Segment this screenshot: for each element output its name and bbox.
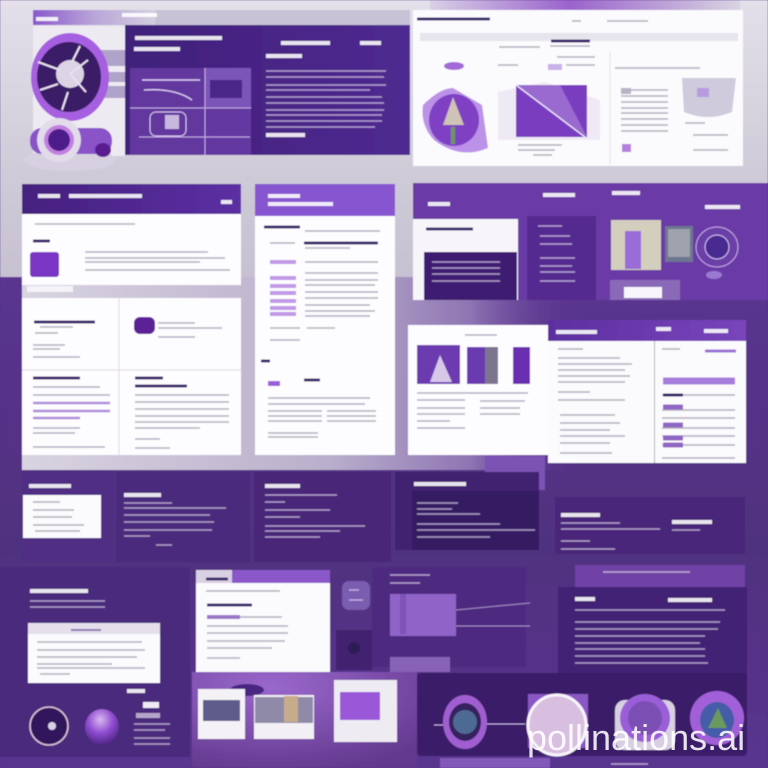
- text block: columns: [498, 41, 700, 165]
- panel: lavender gallery: [192, 672, 417, 768]
- band: bottom-right caption: [575, 565, 745, 590]
- small table graphic: [682, 78, 736, 150]
- bottom caption strips: [440, 758, 648, 768]
- dividers: [22, 298, 241, 455]
- heading: [575, 599, 712, 600]
- panel heading: [134, 38, 222, 49]
- panel: bottom-left dark: [0, 567, 190, 757]
- icon: ring: [696, 227, 738, 279]
- chart panel: [130, 68, 251, 155]
- text lines: [426, 193, 740, 281]
- header bar: [255, 184, 395, 216]
- panel: top-right white report: [413, 10, 743, 166]
- panel: white note with purple header: [196, 570, 330, 672]
- icon: dark badge: [134, 317, 155, 334]
- text block: [575, 610, 725, 663]
- card: dark right: [555, 497, 745, 554]
- image: white disc: [528, 694, 588, 755]
- card: text: [116, 472, 250, 562]
- white chip: [27, 286, 73, 292]
- panel: centre white report: [255, 184, 395, 455]
- watermark: pollinations.ai: [527, 717, 745, 758]
- dark report panel: [125, 25, 410, 155]
- text block: [558, 349, 735, 458]
- highlighted lines: [33, 378, 229, 448]
- white side area: [33, 26, 125, 156]
- image tiles: [417, 345, 530, 384]
- top gradient bar: [430, 0, 740, 10]
- lower white sub-panels: [22, 298, 241, 455]
- panel: top-left device and dark report: [24, 10, 410, 171]
- panel: left white report: [22, 184, 241, 455]
- panel: glassy folder: [372, 567, 530, 667]
- list items: [33, 322, 222, 357]
- row of dark panels: [22, 456, 745, 562]
- icon: purple folder: [30, 252, 59, 277]
- panel: lavender header report: [548, 320, 746, 463]
- icon: purple lens: [422, 88, 488, 152]
- image: colored blocks: [254, 695, 314, 739]
- icon: ring: [30, 707, 68, 745]
- labels: [127, 691, 170, 744]
- icon: green core lens: [690, 691, 744, 745]
- panel: dark text report: [558, 587, 747, 707]
- panel: white image report: [408, 325, 548, 455]
- text block: [35, 224, 230, 270]
- image: purple cube: [334, 680, 397, 742]
- strip: lavender: [390, 657, 450, 672]
- heading: [30, 591, 105, 607]
- purple thumbnail: [622, 144, 631, 152]
- image: boxes: [611, 220, 693, 270]
- text block: [268, 231, 380, 437]
- caption box: [610, 280, 680, 300]
- icon: purple device with flower: [31, 33, 125, 121]
- image: towers: [198, 689, 245, 739]
- highlighted list: [663, 378, 735, 384]
- text block: [266, 43, 386, 135]
- panel: right dark report: [413, 183, 768, 300]
- icon: purple badge: [444, 62, 464, 70]
- white note: [28, 623, 160, 683]
- card: text: [254, 472, 391, 562]
- panel heading: [417, 19, 648, 21]
- card: white note: [22, 470, 114, 562]
- icon: purple camera lens: [615, 694, 675, 750]
- text block: [417, 393, 528, 428]
- icon: purple orb: [85, 709, 119, 745]
- text block: [206, 591, 288, 658]
- header strip: [33, 10, 410, 25]
- highlighted stripes: [270, 262, 296, 314]
- header bar: [22, 184, 241, 214]
- icon: ring lens device: [24, 118, 116, 171]
- icon: dark cap: [230, 684, 264, 696]
- chart: diagonal purple box: [498, 82, 600, 155]
- heading: [465, 334, 497, 336]
- panel: rings row: [417, 673, 747, 768]
- purple accent: [264, 226, 300, 228]
- icon: dark dot: [336, 630, 372, 670]
- icon: ring lens: [434, 695, 525, 749]
- band: lavender strip: [485, 456, 545, 490]
- purple tag: [268, 381, 280, 386]
- icon: small badge: [342, 581, 370, 610]
- card: dark title: [395, 472, 539, 550]
- white block: [413, 219, 518, 300]
